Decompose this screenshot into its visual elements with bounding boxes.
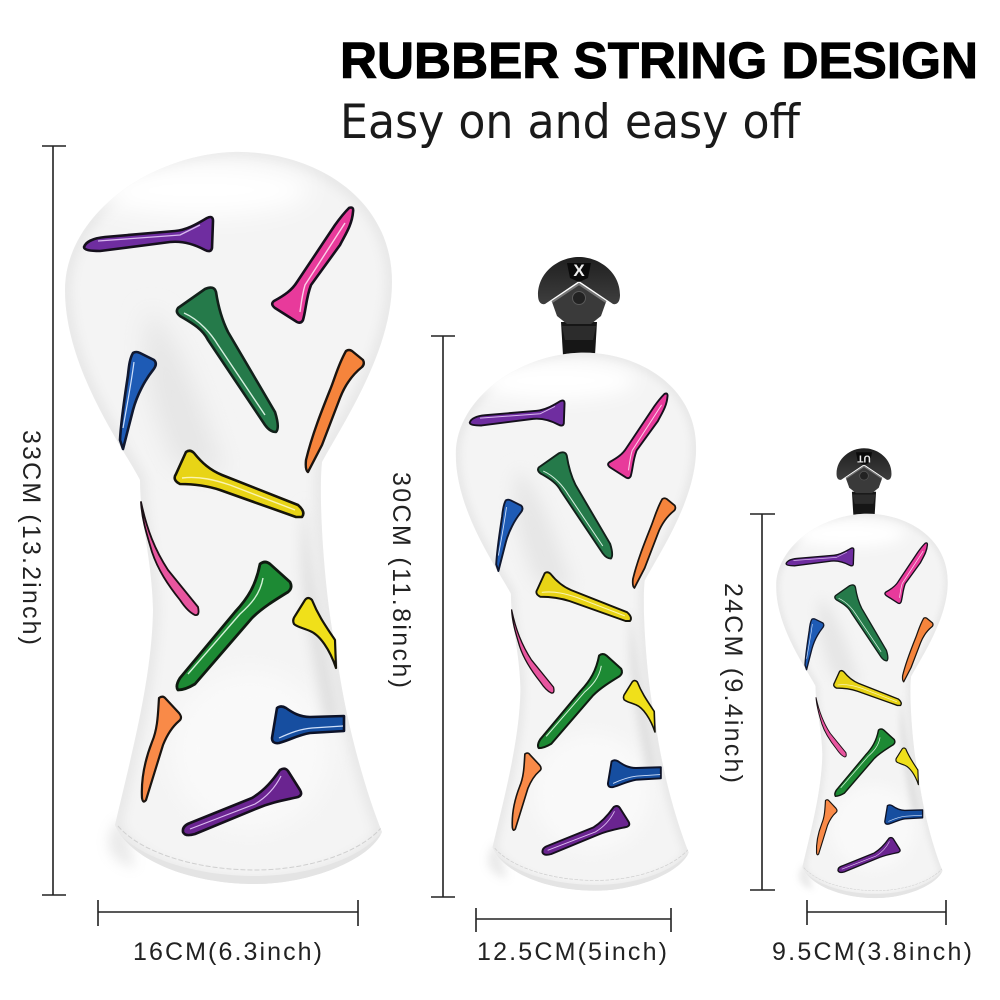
label: small width: 9.5CM(3.8inch) [772, 938, 972, 966]
dimension: small height [750, 514, 775, 890]
label: small height: 24CM (9.4inch) [719, 583, 747, 783]
label: medium width: 12.5CM(5inch) [477, 938, 667, 966]
small head cover knob [837, 448, 891, 525]
medium head cover knob: X [573, 261, 585, 280]
dimension: small width [807, 900, 946, 925]
dimension: medium width [476, 908, 671, 932]
medium head cover [456, 353, 696, 895]
medium head cover knob [538, 257, 620, 372]
label: large height: 33CM (13.2inch) [17, 430, 45, 645]
dimension: large width [98, 900, 358, 926]
title: RUBBER STRING DESIGN [340, 32, 978, 89]
label: medium height: 30CM (11.8inch) [387, 472, 415, 688]
subtitle: Easy on and easy off [340, 95, 802, 150]
small head cover [776, 514, 948, 901]
large head cover [65, 152, 392, 890]
small head cover knob: UT [856, 453, 871, 464]
label: large width: 16CM(6.3inch) [133, 938, 322, 966]
dimension: large height [42, 146, 66, 895]
dimension: medium height [431, 336, 455, 897]
